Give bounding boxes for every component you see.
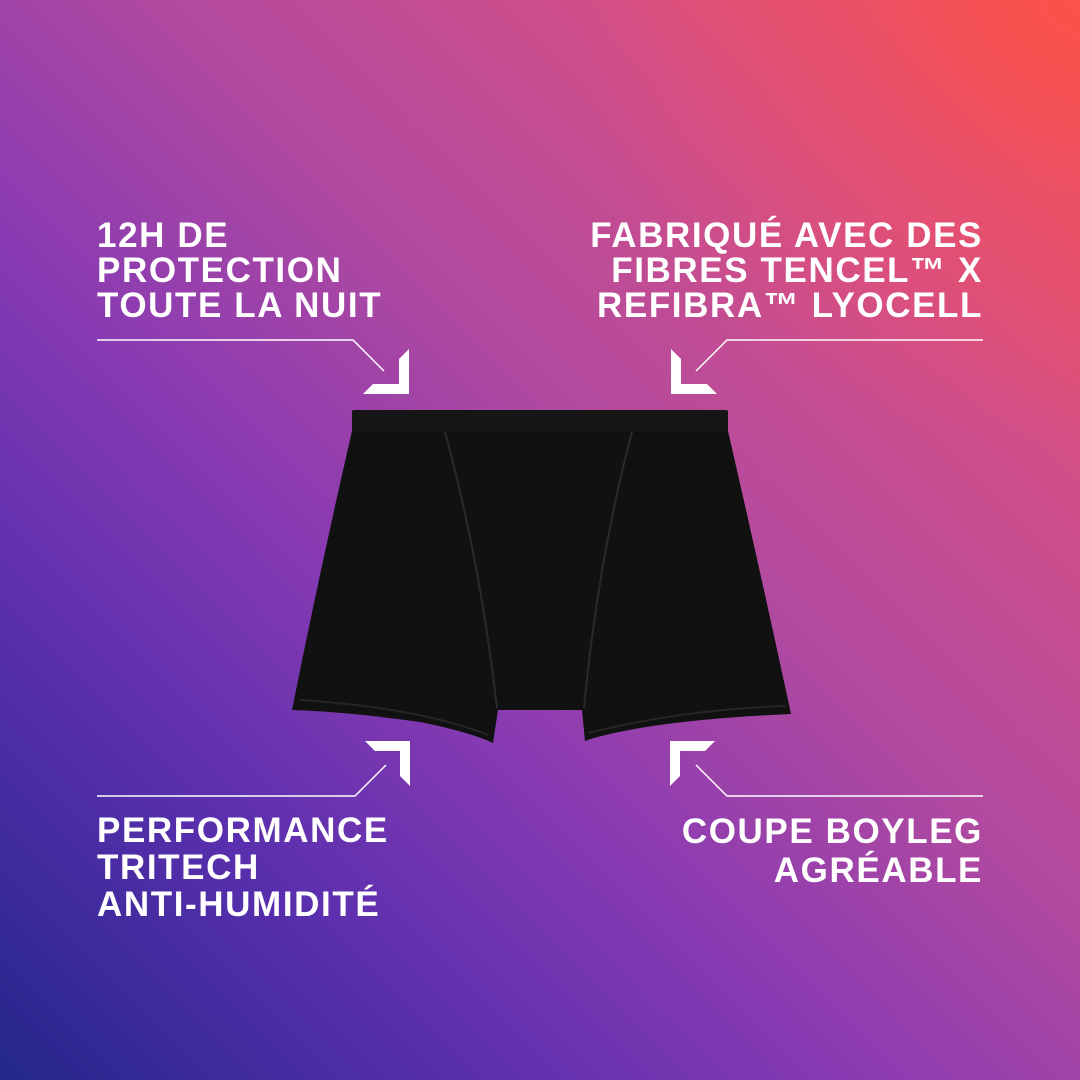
text: top left feature: 12H DE (97, 216, 229, 255)
callout: bottom right leader and bracket (670, 741, 983, 796)
text: top left feature (97, 216, 382, 325)
text: top right feature: REFIBRA™ LYOCELL (597, 286, 983, 325)
text: bottom right feature: COUPE BOYLEG (682, 812, 983, 851)
text: bottom left feature (97, 811, 389, 924)
text: bottom right feature: AGRÉABLE (774, 851, 983, 890)
text: bottom left feature: PERFORMANCE (97, 811, 389, 850)
text: bottom left feature: TRITECH (97, 848, 260, 887)
text: top right feature: FIBRES TENCEL™ X (611, 251, 983, 290)
text: bottom right feature (682, 812, 983, 890)
callout: top right leader and bracket (671, 340, 983, 394)
product: black boxer brief (292, 410, 791, 743)
text: top right feature (590, 216, 983, 325)
text: top left feature: TOUTE LA NUIT (97, 286, 382, 325)
callout: bottom left leader and bracket (97, 741, 410, 796)
callout: top left leader and bracket (97, 340, 409, 394)
text: bottom left feature: ANTI-HUMIDITÉ (97, 885, 380, 924)
text: top left feature: PROTECTION (97, 251, 342, 290)
text: top right feature: FABRIQUÉ AVEC DES (590, 216, 983, 255)
